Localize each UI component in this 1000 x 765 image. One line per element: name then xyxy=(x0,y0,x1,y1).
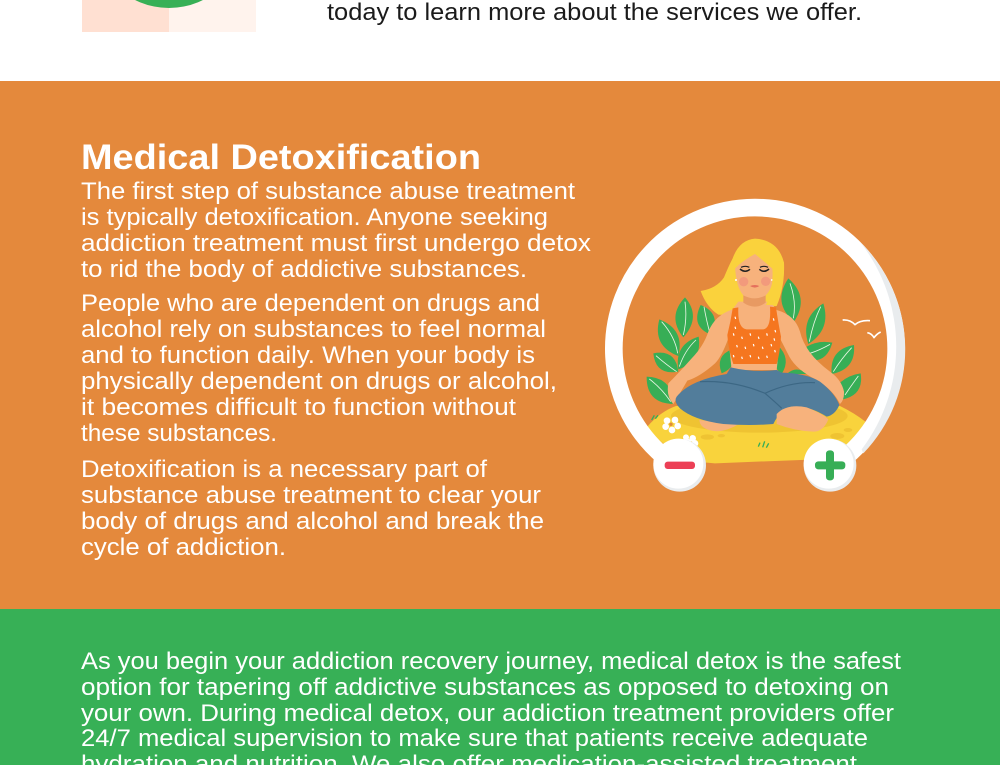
illustration: sand ground xyxy=(647,399,865,463)
text block: recovery journey paragraph: 24/7 medical supervision to make sure that patients receive adequate xyxy=(81,725,868,752)
illustration: neck and face xyxy=(735,253,773,307)
text block: first paragraph: is typically detoxification. Anyone seeking xyxy=(81,204,548,231)
heading: Medical Detoxification: Medical Detoxification xyxy=(81,138,481,177)
ring: white arc xyxy=(614,208,896,457)
icon: pale tiles with green circle xyxy=(82,0,256,32)
text block: third paragraph: body of drugs and alcohol and break the xyxy=(81,508,544,535)
illustration: orange crop top xyxy=(727,307,781,364)
text block: first paragraph: addiction treatment must first undergo detox xyxy=(81,230,591,257)
illustration: right foot xyxy=(777,406,828,432)
text block: third paragraph: cycle of addiction. xyxy=(81,534,286,561)
panel: green medical detox section xyxy=(0,609,1000,765)
text block: second paragraph: and to function daily. When your body is xyxy=(81,342,535,369)
panel: medical detoxification xyxy=(0,81,1000,609)
text block: second paragraph: these substances. xyxy=(81,420,277,447)
panel: top white section xyxy=(0,0,1000,81)
illustration: blue jeans xyxy=(676,367,839,425)
text block: second paragraph: it becomes difficult to function without xyxy=(81,394,516,421)
button: minus xyxy=(653,439,706,492)
text block: first paragraph: to rid the body of addictive substances. xyxy=(81,256,527,283)
illustration: front hair xyxy=(734,239,784,305)
button: plus xyxy=(804,439,856,492)
illustration: birds xyxy=(843,320,881,338)
illustration: leaf veins xyxy=(649,283,858,402)
illustration: back hair xyxy=(701,239,784,315)
illustration: leaves xyxy=(647,278,861,404)
text block: third paragraph: Detoxification is a necessary part of xyxy=(81,456,487,483)
illustration: left foot xyxy=(699,420,740,431)
ring: shadow crescent xyxy=(861,243,905,453)
illustration: flowers xyxy=(662,417,698,447)
text block: third paragraph: substance abuse treatment to clear your xyxy=(81,482,541,509)
text block: recovery journey paragraph: option for tapering off addictive substances as opposed to detoxing on xyxy=(81,674,889,701)
text block: recovery journey paragraph xyxy=(81,648,901,765)
text block: second paragraph xyxy=(81,290,557,447)
text block: second paragraph: physically dependent on drugs or alcohol, xyxy=(81,368,557,395)
text block: first paragraph xyxy=(81,178,591,283)
illustration: arms and torso xyxy=(668,302,844,404)
illustration: meditating woman in ring xyxy=(614,208,905,492)
text block: recovery journey paragraph: your own. During medical detox, our addiction treatment providers offer xyxy=(81,700,894,727)
text block: second paragraph: alcohol rely on substances to feel normal xyxy=(81,316,546,343)
text block: first paragraph: The first step of substance abuse treatment xyxy=(81,178,575,205)
text block: third paragraph xyxy=(81,456,544,561)
text block: second paragraph: People who are dependent on drugs and xyxy=(81,290,540,317)
text block: recovery journey paragraph: As you begin your addiction recovery journey, medical detox is the safest xyxy=(81,648,901,675)
